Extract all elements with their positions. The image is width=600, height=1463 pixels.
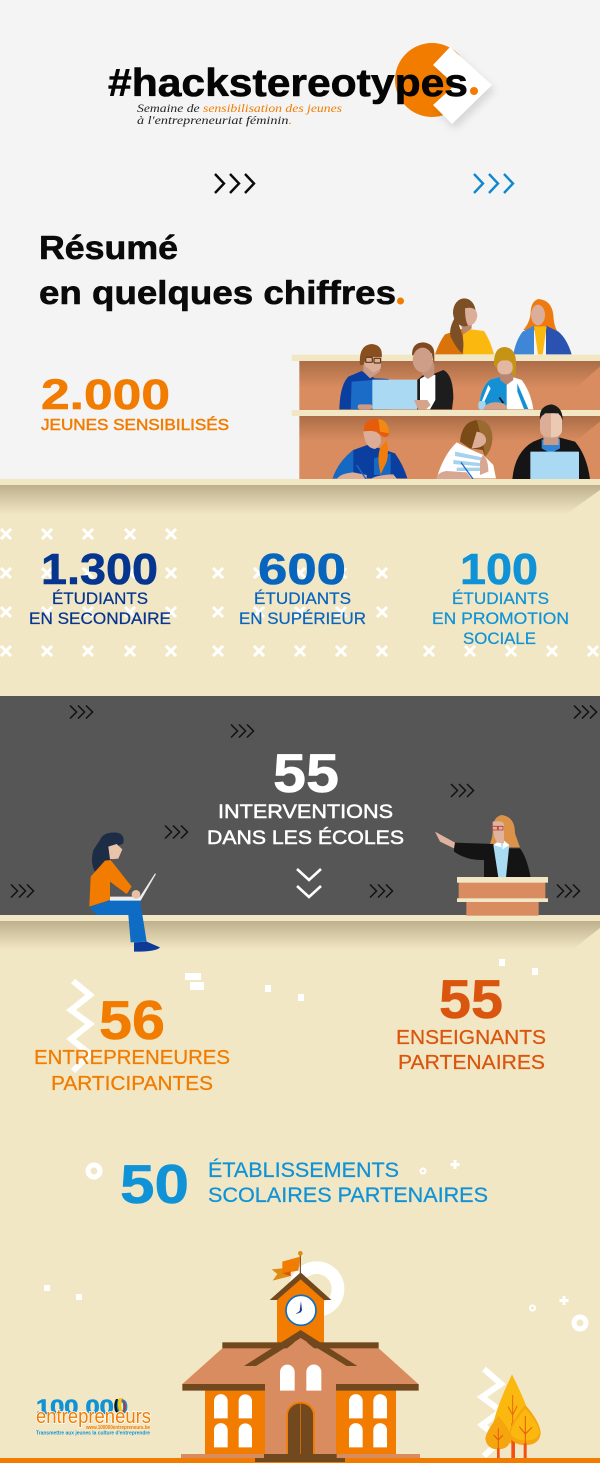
- number: 100: [460, 545, 538, 594]
- stat: 1.300 secondaire: [29, 545, 171, 628]
- logo: hackstereotypes: [108, 43, 492, 127]
- number: 1.300: [41, 545, 158, 594]
- glasses: [492, 826, 503, 830]
- pattern: white crosses: [1, 529, 598, 656]
- icon: belgian flag on zero: [114, 1398, 126, 1414]
- face: [493, 821, 504, 843]
- label line 1: ÉTUDIANTS: [52, 589, 148, 608]
- icon: blue chevrons: [474, 174, 513, 193]
- logo number: 100 000: [36, 1396, 128, 1419]
- hand: [435, 832, 455, 848]
- stat: 100 promotion sociale: [432, 545, 569, 648]
- laptop blue lower: [530, 452, 579, 480]
- logo: 100 000 entrepreneurs: [36, 1396, 151, 1436]
- middle shelf and lower wall: [292, 410, 600, 480]
- door: [286, 1402, 315, 1454]
- label line 2: DANS LES ÉCOLES: [207, 826, 404, 849]
- ground: school step: [255, 1458, 345, 1462]
- label line 2: SCOLAIRES PARTENAIRES: [208, 1184, 488, 1207]
- illustration: school: [181, 1251, 420, 1462]
- man with laptop: [512, 404, 590, 479]
- icon: orange circle: [395, 43, 469, 117]
- logo tagline: Transmettre aux jeunes la culture d'entreprendre: [36, 1430, 150, 1436]
- side roof: [182, 1348, 418, 1384]
- title: hashtag: #hackstereotypes: [108, 62, 468, 105]
- base: [181, 1454, 420, 1458]
- icon: black chevrons: [215, 174, 254, 193]
- shadow under shelf: [0, 485, 600, 515]
- orange haired student: [333, 419, 407, 480]
- illustration: lecture hall: [292, 298, 600, 480]
- decoration: white zigzag: [71, 981, 90, 1071]
- label line 2: EN SUPÉRIEUR: [239, 609, 366, 628]
- stat: 55 enseignants: [396, 968, 546, 1074]
- hand: [132, 890, 140, 899]
- panel: top background: [0, 0, 600, 480]
- decoration: white zigzag near trees: [482, 1369, 501, 1456]
- panel: beige background: [0, 480, 600, 1463]
- heading period: [397, 298, 404, 304]
- roof ridge: [222, 1342, 379, 1348]
- subtitle line 2: à l'entrepreneuriat féminin .: [137, 113, 292, 127]
- left wing: [205, 1390, 265, 1454]
- right tree: [509, 1405, 541, 1458]
- icon: white notched diamond: [433, 47, 492, 124]
- stat: 600 supérieur: [239, 545, 366, 628]
- logo url: www.100000entrepreneurs.be: [85, 1425, 150, 1431]
- logo word: entrepreneurs: [36, 1406, 151, 1428]
- flag: [272, 1251, 303, 1281]
- label line 2: EN PROMOTION: [432, 609, 569, 628]
- man with glasses: [339, 344, 389, 409]
- shelf and wall upper: [292, 355, 600, 410]
- tower: [277, 1277, 324, 1347]
- label line 2: PARTENAIRES: [398, 1052, 545, 1074]
- label: JEUNES SENSIBILISÉS: [41, 415, 229, 434]
- decoration: rings and plus: [44, 1160, 586, 1329]
- hair: [488, 815, 520, 847]
- label line 2: PARTICIPANTES: [51, 1073, 213, 1095]
- left tree: [485, 1416, 511, 1458]
- central roof: [244, 1330, 357, 1366]
- stat: 55 interventions: [207, 742, 404, 849]
- heading: en quelques chiffres: en quelques chiffres: [39, 274, 396, 311]
- tall tree: [493, 1374, 532, 1458]
- striped student: [437, 420, 496, 479]
- label line 1: ENTREPRENEURES: [34, 1047, 230, 1069]
- label line 1: ÉTUDIANTS: [452, 589, 549, 608]
- upper windows: [280, 1364, 321, 1391]
- decoration: white blocks: [185, 959, 538, 1001]
- heading: résumé: Résumé: [39, 229, 178, 266]
- top row woman right: [513, 299, 572, 354]
- tower roof: [270, 1272, 331, 1300]
- icon: white down chevrons: [297, 869, 321, 897]
- lectern: [457, 877, 548, 916]
- label line 1: INTERVENTIONS: [218, 801, 393, 823]
- stat: 56 entrepreneures: [34, 989, 230, 1095]
- subtitle: Semaine de sensibilisation des jeunes: [137, 101, 342, 115]
- arm and jacket: [454, 843, 531, 877]
- label line 1: ÉTUDIANTS: [254, 589, 351, 608]
- number: 55: [439, 968, 503, 1030]
- number: 56: [99, 989, 165, 1051]
- label line 2: EN SECONDAIRE: [29, 609, 171, 628]
- white ring behind tower: [295, 1268, 338, 1310]
- illustration: autumn trees: [485, 1374, 541, 1458]
- shelf: lecture hall floor: [0, 479, 600, 485]
- shadow under board shelf: [0, 921, 600, 950]
- small chevrons: [11, 706, 596, 898]
- illustration: teacher at lectern: [435, 815, 548, 916]
- panel: dark board: [0, 696, 600, 916]
- shirt: [493, 840, 509, 877]
- title period: [470, 87, 478, 95]
- shoe: [134, 942, 160, 952]
- man in black jacket: [412, 342, 453, 410]
- number: 50: [120, 1153, 189, 1215]
- blonde student: [478, 347, 533, 410]
- stat: 50 établissements: [120, 1153, 488, 1215]
- illustration: woman with laptop: [89, 833, 160, 952]
- top row woman left: [435, 298, 494, 354]
- right wing: [336, 1390, 396, 1454]
- label line 1: ÉTABLISSEMENTS: [208, 1159, 399, 1182]
- central block: [265, 1337, 336, 1454]
- laptop blue: [372, 380, 417, 409]
- number: 600: [258, 545, 346, 594]
- ground: orange band: [0, 1458, 600, 1463]
- hair: [92, 833, 124, 872]
- laptop: [110, 873, 156, 901]
- number: 55: [273, 742, 339, 804]
- label line 1: ENSEIGNANTS: [396, 1027, 546, 1049]
- eaves: [182, 1384, 419, 1391]
- label line 3: SOCIALE: [463, 629, 536, 648]
- sweater: [89, 860, 132, 907]
- shelf: board floor: [0, 915, 600, 921]
- clock: [286, 1295, 316, 1325]
- stat: 2.000 jeunes: [41, 371, 229, 434]
- number: 2.000: [41, 371, 170, 419]
- legs: [89, 900, 147, 942]
- face: [108, 844, 122, 859]
